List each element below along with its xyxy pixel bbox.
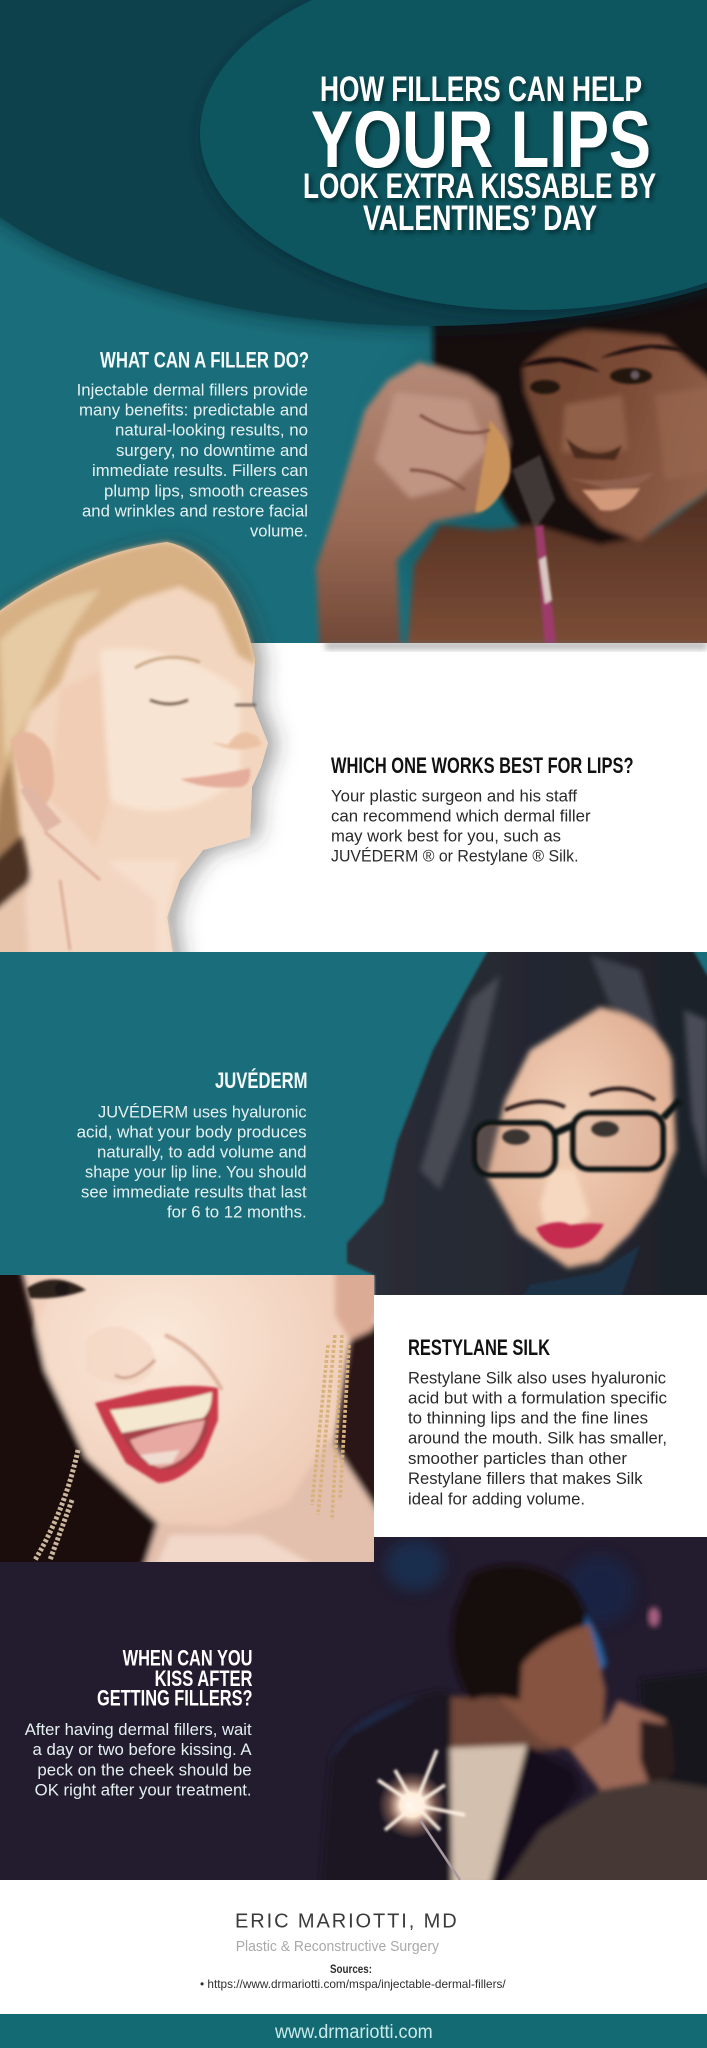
text block: restylane silk: Restylane fillers that makes Silk — [408, 1470, 643, 1488]
text block: restylane silk — [408, 1335, 667, 1508]
photo: woman with glasses — [347, 945, 707, 1310]
sources: • https://www.drmariotti.com/mspa/injectable-dermal-fillers/ — [200, 1977, 506, 1991]
text block: what can a filler do: volume. — [250, 522, 308, 540]
text block: restylane silk: to thinning lips and the fine lines — [408, 1409, 648, 1427]
shadow under photo — [325, 641, 707, 650]
panel: footer website bar: www.drmariotti.com — [274, 2022, 433, 2043]
text block: restylane silk: acid but with a formulation specific — [408, 1389, 667, 1407]
photo: smiling woman with red lips — [0, 1275, 374, 1562]
text block: juvederm: JUVÉDERM — [215, 1068, 308, 1093]
logo: eric mariotti: ERIC MARIOTTI, MD — [235, 1911, 457, 1933]
panel: footer website bar — [0, 2014, 707, 2048]
text block: what can a filler do: surgery, no downtime and — [116, 442, 308, 460]
text block: when can you kiss: After having dermal fillers, wait — [25, 1721, 252, 1739]
text block: which one works best: may work best for you, such as — [331, 828, 561, 846]
photo: woman with curly hair holding apple — [312, 288, 707, 643]
text block: what can a filler do: many benefits: predictable and — [79, 402, 308, 420]
text block: which one works best: can recommend which dermal filler — [331, 808, 591, 826]
logo: eric mariotti — [235, 1911, 457, 1955]
text block: what can a filler do: immediate results. Fillers can — [92, 462, 308, 480]
text block: what can a filler do — [77, 348, 309, 540]
text block: juvederm: for 6 to 12 months. — [167, 1204, 307, 1222]
icon: gold earring — [312, 1335, 349, 1520]
text block: restylane silk: around the mouth. Silk has smaller, — [408, 1429, 667, 1447]
text block: what can a filler do: plump lips, smooth creases — [104, 482, 308, 500]
text block: what can a filler do: Injectable dermal fillers provide — [77, 382, 308, 400]
sources: Sources: — [330, 1962, 372, 1976]
sparkler — [378, 1750, 465, 1880]
panel: footer white area — [0, 1880, 707, 2014]
text block: when can you kiss: WHEN CAN YOU — [123, 1646, 252, 1671]
sources — [200, 1962, 506, 1991]
photo: blonde woman with eyes closed — [0, 542, 268, 975]
logo: eric mariotti: Plastic & Reconstructive Surgery — [236, 1939, 440, 1955]
panel: header teal background — [0, 0, 707, 643]
text block: when can you kiss: peck on the cheek should be — [37, 1762, 252, 1780]
text block: restylane silk: ideal for adding volume. — [408, 1490, 585, 1508]
text block: juvederm: shape your lip line. You should — [85, 1164, 307, 1182]
shape: main title ellipse — [200, 0, 707, 310]
text block: when can you kiss: GETTING FILLERS? — [97, 1686, 252, 1711]
panel: restylane white box — [374, 1295, 707, 1537]
text block: when can you kiss: a day or two before kissing. A — [32, 1741, 252, 1759]
photo: couple kissing with sparkler — [320, 1539, 707, 1895]
text block: juvederm: see immediate results that last — [81, 1184, 307, 1202]
text block: when can you kiss — [25, 1646, 253, 1800]
text block: restylane silk: RESTYLANE SILK — [408, 1335, 550, 1360]
title: VALENTINES’ DAY — [363, 199, 597, 238]
text block: juvederm: acid, what your body produces — [77, 1123, 307, 1141]
text block: when can you kiss: KISS AFTER — [155, 1666, 253, 1691]
text block: restylane silk: Restylane Silk also uses hyaluronic — [408, 1369, 666, 1387]
text block: which one works best: Your plastic surgeon and his staff — [331, 788, 577, 806]
text block: when can you kiss: OK right after your treatment. — [35, 1782, 252, 1800]
text block: juvederm: naturally, to add volume and — [97, 1143, 307, 1161]
text block: juvederm — [77, 1068, 307, 1222]
text block: which one works best: JUVÉDERM ® or Restylane ® Silk. — [331, 847, 578, 866]
text block: restylane silk: smoother particles than other — [408, 1450, 628, 1468]
text block: what can a filler do: natural-looking results, no — [115, 422, 308, 440]
text block: what can a filler do: and wrinkles and restore facial — [82, 502, 308, 520]
shape: dark teal ellipse — [0, 0, 707, 326]
panel: juvederm teal section — [0, 952, 707, 1275]
title — [303, 70, 656, 238]
text block: which one works best — [331, 753, 634, 866]
panel: dark section for kissing — [0, 1537, 707, 1880]
icon: necklace — [35, 1450, 78, 1560]
text block: what can a filler do: WHAT CAN A FILLER DO? — [100, 348, 309, 372]
text block: juvederm: JUVÉDERM uses hyaluronic — [98, 1102, 307, 1121]
